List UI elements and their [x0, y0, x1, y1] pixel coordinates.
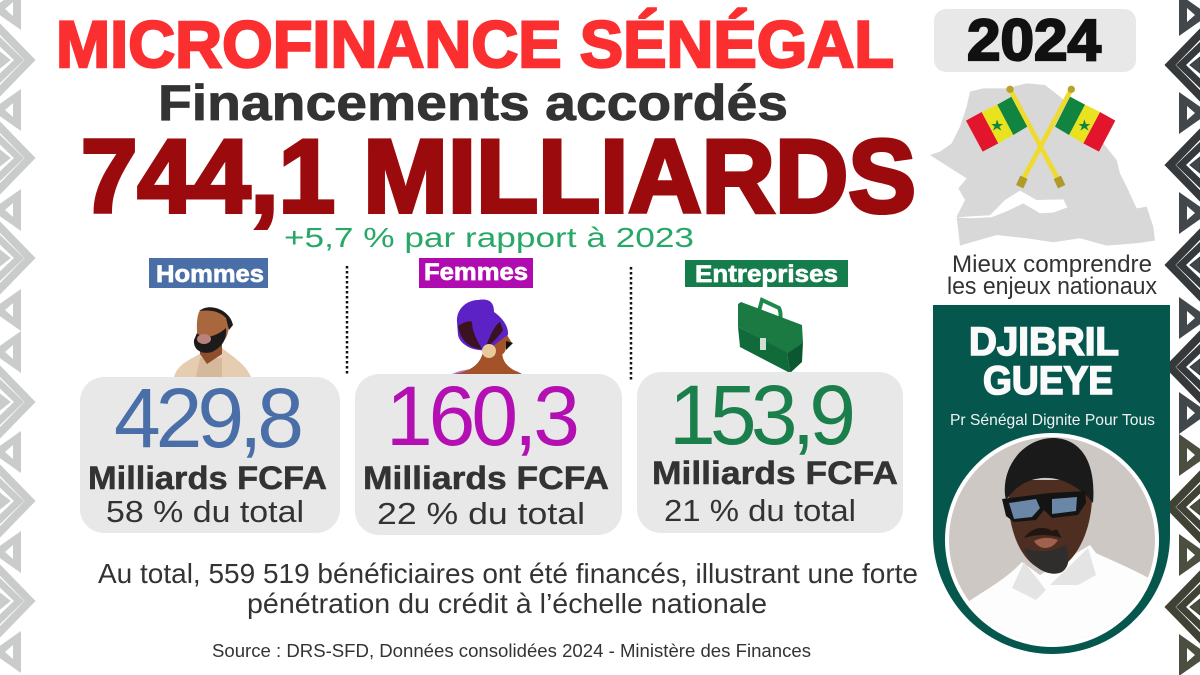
entreprises amount: 153,9	[669, 368, 856, 462]
femmes amount: 160,3	[386, 369, 580, 463]
photo portrait	[945, 433, 1159, 647]
author name	[969, 320, 1119, 403]
author badge	[933, 305, 1170, 660]
year badge	[934, 8, 1136, 73]
icon: briefcase	[738, 300, 803, 373]
right decorative pattern	[1170, 0, 1200, 675]
hommes label: Hommes	[156, 261, 264, 288]
growth note: +5,7 % par rapport à 2023	[284, 222, 694, 253]
title: MICROFINANCE SÉNÉGAL	[56, 7, 894, 81]
author role: Pr Sénégal Dignite Pour Tous	[950, 412, 1155, 429]
hommes amount: 429,8	[114, 371, 304, 465]
summary text: pénétration du crédit à l’échelle nationale	[247, 588, 767, 619]
tagline: Mieux comprendre	[952, 251, 1152, 278]
femmes unit: Milliards FCFA	[363, 460, 609, 496]
entreprises unit: Milliards FCFA	[652, 455, 898, 491]
author name: DJIBRIL	[969, 320, 1119, 364]
tagline: les enjeux nationaux	[947, 273, 1157, 300]
femmes label: Femmes	[424, 259, 528, 286]
hommes card	[80, 377, 340, 533]
author name: GUEYE	[983, 359, 1113, 403]
summary text	[98, 558, 918, 619]
subtitle: Financements accordés	[158, 75, 788, 131]
entreprises label: Entreprises	[695, 261, 838, 288]
panel: hommes	[80, 258, 340, 533]
shield	[933, 305, 1170, 654]
map silhouette	[930, 83, 1155, 246]
tagline	[947, 251, 1157, 300]
source: Source : DRS-SFD, Données consolidées 2024 - Ministère des Finances	[212, 641, 811, 661]
panel: entreprises	[637, 260, 903, 533]
femmes share: 22 % du total	[377, 496, 585, 531]
left decorative pattern	[0, 0, 30, 673]
entreprises card	[637, 372, 903, 533]
panel: femmes	[355, 258, 622, 535]
icon: man	[174, 307, 251, 377]
column divider right	[630, 267, 632, 380]
femmes card	[355, 374, 622, 535]
headline total: 744,1 MILLIARDS	[81, 119, 916, 235]
map of Senegal with crossed flags	[930, 83, 1155, 246]
icon: woman	[450, 300, 523, 375]
hommes unit: Milliards FCFA	[88, 460, 327, 496]
column divider left	[346, 266, 348, 376]
summary text: Au total, 559 519 bénéficiaires ont été financés, illustrant une forte	[98, 558, 918, 589]
hommes share: 58 % du total	[106, 494, 304, 529]
entreprises share: 21 % du total	[664, 493, 856, 528]
crossed flags	[966, 86, 1115, 188]
year badge: 2024	[967, 8, 1101, 73]
